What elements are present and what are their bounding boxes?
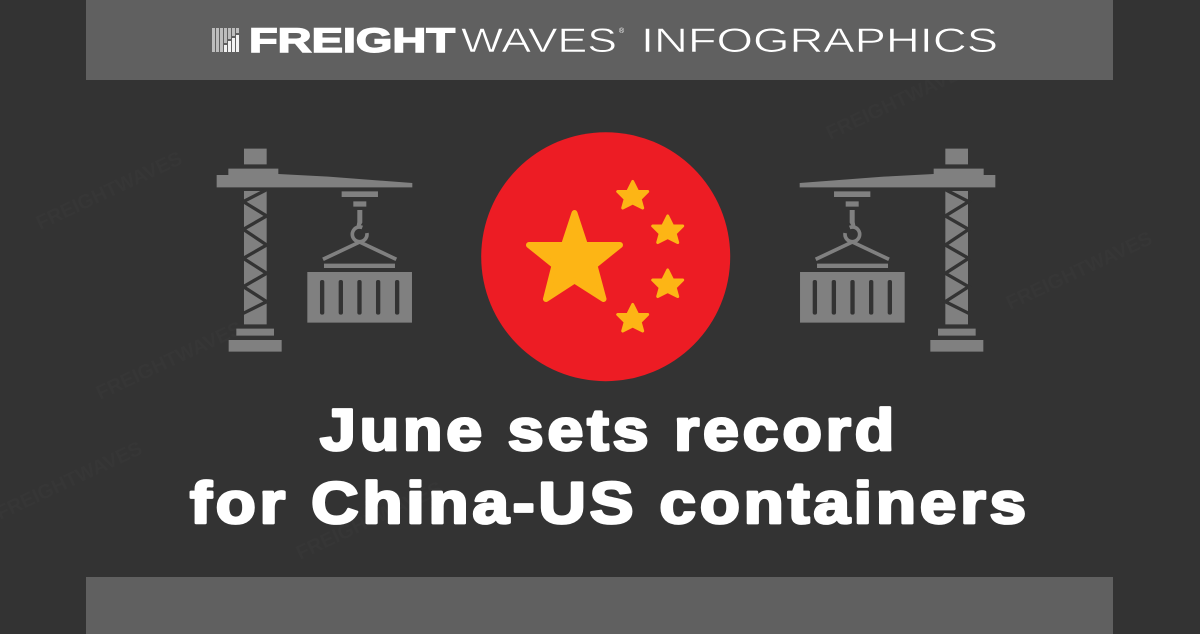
title (190, 398, 1030, 536)
icon: small stars (618, 182, 683, 331)
watermark pattern: FREIGHTWAVES (293, 478, 446, 565)
watermark pattern: FREIGHTWAVES (93, 318, 246, 405)
watermark pattern: FREIGHTWAVES (1003, 228, 1156, 315)
icon: right crane with container (800, 149, 995, 352)
logo: FreightWaves Infographics: ® (619, 27, 625, 35)
footer bar (86, 577, 1113, 634)
logo: FreightWaves Infographics: FREIGHT (249, 22, 455, 60)
logo: FreightWaves Infographics (249, 22, 998, 60)
title: June sets record (320, 398, 898, 463)
logo: FreightWaves Infographics: WAVES (461, 22, 617, 60)
logo: FreightWaves Infographics: INFOGRAPHICS (641, 22, 998, 60)
watermark pattern: FREIGHTWAVES (823, 58, 976, 145)
icon: left crane with container (217, 149, 412, 352)
icon: large star (529, 213, 620, 299)
header bar (86, 0, 1113, 80)
title: for China-US containers (190, 471, 1030, 536)
watermark pattern (0, 58, 1156, 565)
icon: FreightWaves logo bars (212, 28, 239, 52)
watermark pattern: FREIGHTWAVES (33, 148, 186, 235)
icon: China flag circle (481, 132, 730, 381)
